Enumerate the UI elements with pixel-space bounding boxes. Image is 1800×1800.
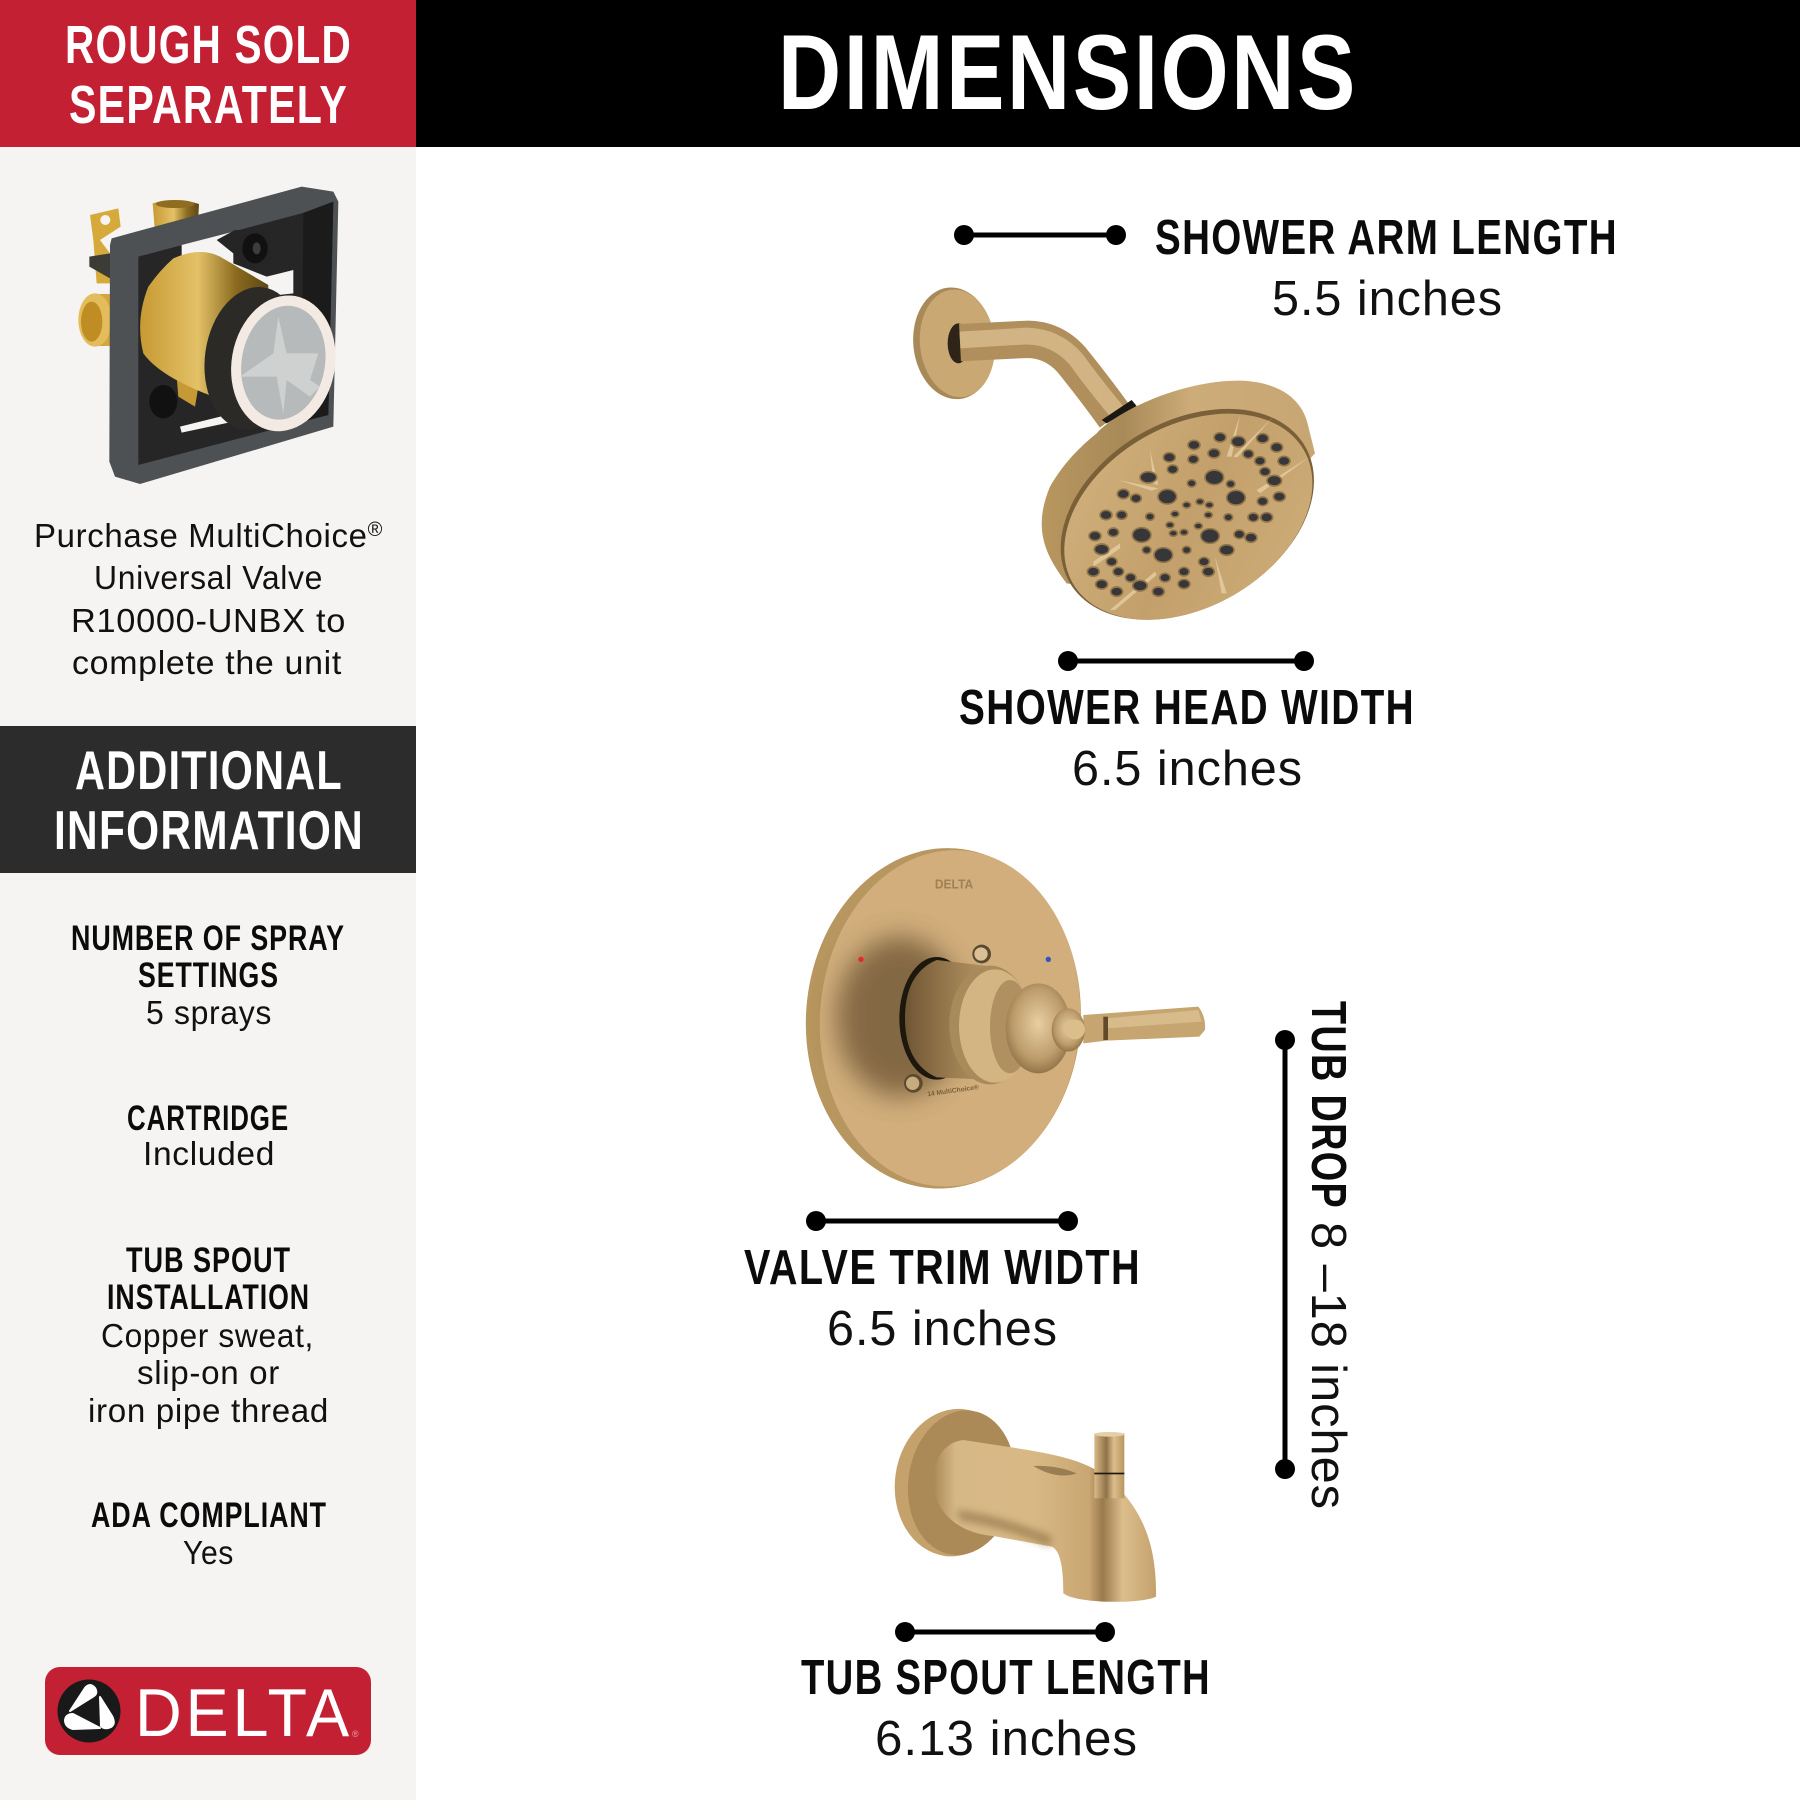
spec: tub spout installation: slip-on or <box>137 1354 280 1391</box>
label: valve trim width: VALVE TRIM WIDTH <box>744 1241 1141 1295</box>
illustration: valve trim and handle: 14 MultiChoice® <box>927 1083 979 1098</box>
dimension line: shower arm <box>954 225 1126 245</box>
label: shower head width: 6.5 inches <box>1072 742 1303 796</box>
spec: ada compliant <box>91 1496 327 1571</box>
label: valve trim width: 6.5 inches <box>827 1302 1058 1356</box>
label: shower arm length <box>1155 211 1618 326</box>
spec: ada compliant: ADA COMPLIANT <box>91 1496 327 1535</box>
dimension line: tub drop <box>1275 1030 1295 1479</box>
spec: number of spray settings: NUMBER OF SPRAY <box>71 919 345 958</box>
label: shower arm length: SHOWER ARM LENGTH <box>1155 211 1618 265</box>
text: purchase note: Universal Valve <box>94 559 323 596</box>
spec: tub spout installation <box>88 1241 329 1429</box>
text: purchase note: Purchase MultiChoice <box>34 517 368 554</box>
text: purchase note: complete the unit <box>72 644 342 681</box>
panel: left sidebar <box>0 0 416 1800</box>
banner: additional information: ADDITIONAL <box>75 739 343 801</box>
logo: delta: DELTA <box>135 1675 353 1751</box>
spec: tub spout installation: Copper sweat, <box>101 1317 314 1354</box>
label: tub spout length: TUB SPOUT LENGTH <box>801 1651 1211 1705</box>
illustration: rough-in valve <box>78 187 346 484</box>
label: tub spout length: 6.13 inches <box>875 1712 1138 1766</box>
illustration: valve trim and handle: DELTA <box>935 877 973 892</box>
text: purchase note: R10000-UNBX to <box>71 602 346 639</box>
spec: tub spout installation: TUB SPOUT <box>126 1241 291 1280</box>
spec: cartridge: Included <box>143 1135 275 1172</box>
label: valve trim width <box>744 1241 1141 1356</box>
illustration: shower head and arm <box>908 283 1352 663</box>
label: tub drop: 8 –18 inches <box>1301 1222 1355 1510</box>
label: shower arm length: 5.5 inches <box>1272 272 1503 326</box>
spec: cartridge: CARTRIDGE <box>127 1099 289 1138</box>
banner: additional information <box>0 726 416 873</box>
logo: delta: ® <box>352 1729 359 1739</box>
spec: number of spray settings <box>71 919 345 1031</box>
text: purchase note: ® <box>368 519 383 541</box>
spec: cartridge <box>127 1099 289 1172</box>
illustration: valve trim and handle <box>794 839 1205 1198</box>
banner: rough sold separately: ROUGH SOLD <box>65 15 352 75</box>
header: dimensions: DIMENSIONS <box>778 12 1358 132</box>
label: tub spout length <box>801 1651 1211 1766</box>
dimension line: tub spout length <box>895 1622 1115 1642</box>
label: shower head width: SHOWER HEAD WIDTH <box>959 681 1415 735</box>
label: tub drop <box>1301 1001 1355 1510</box>
spec: tub spout installation: iron pipe thread <box>88 1392 329 1429</box>
banner: rough sold separately <box>0 0 416 147</box>
spec: number of spray settings: 5 sprays <box>146 994 272 1031</box>
text: purchase note <box>34 517 383 681</box>
spec: number of spray settings: SETTINGS <box>138 956 279 995</box>
banner: rough sold separately: SEPARATELY <box>69 75 348 135</box>
spec: tub spout installation: INSTALLATION <box>107 1278 310 1317</box>
label: shower head width <box>959 681 1415 796</box>
logo: delta <box>45 1667 371 1755</box>
header: dimensions <box>416 0 1800 147</box>
spec: ada compliant: Yes <box>183 1534 234 1571</box>
illustration: tub spout <box>885 1401 1156 1602</box>
dimension line: valve trim width <box>806 1211 1078 1231</box>
banner: additional information: INFORMATION <box>54 799 364 861</box>
label: tub drop: TUB DROP <box>1301 1001 1355 1209</box>
dimension line: shower head width <box>1058 651 1314 671</box>
